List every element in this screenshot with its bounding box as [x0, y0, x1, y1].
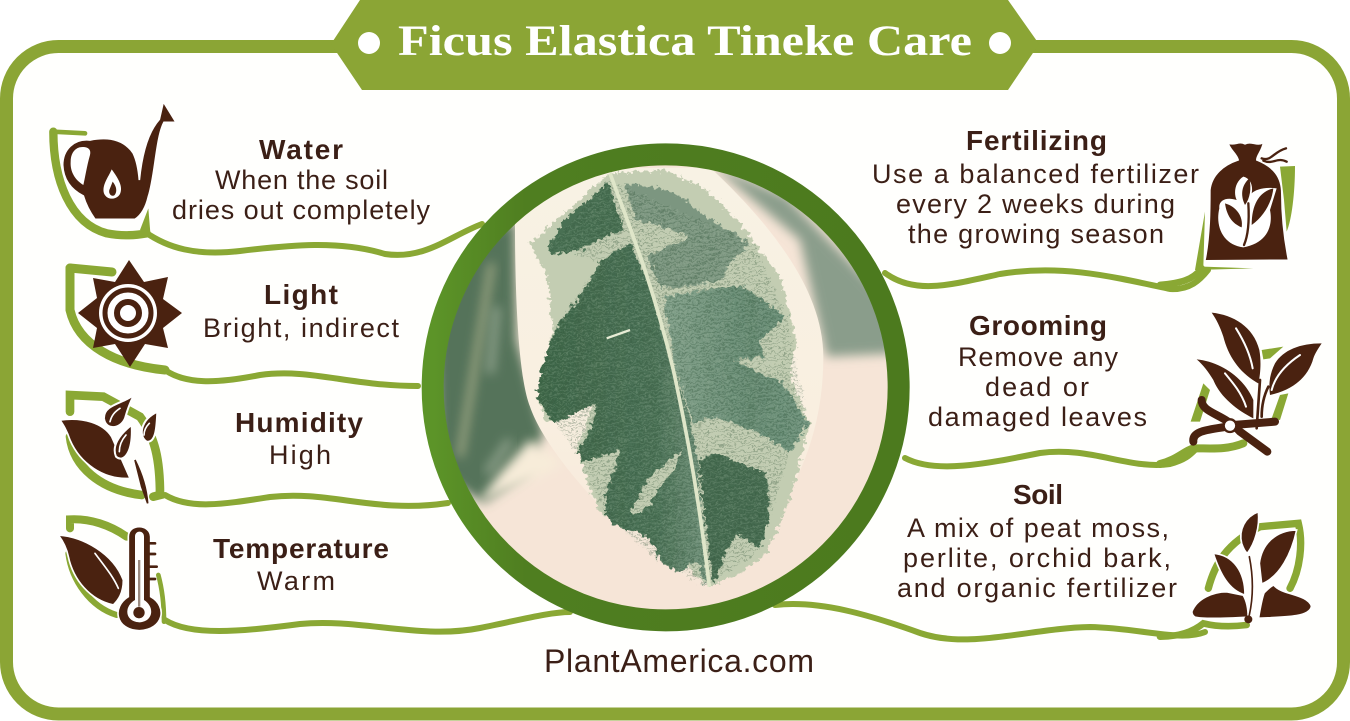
icon: fertilizer bag — [1160, 143, 1295, 285]
description: soil: A mix of peat moss, — [907, 513, 1169, 543]
description: water: dries out completely — [172, 195, 430, 225]
icon: leaves and shears — [1160, 313, 1322, 464]
heading: water: Water — [259, 134, 343, 165]
dark lower-right patch — [698, 453, 770, 587]
website credit: PlantAmerica.com — [544, 643, 814, 679]
description: grooming: dead or — [985, 372, 1089, 402]
pale variegation — [530, 170, 810, 587]
central photo: variegated leaf — [420, 140, 920, 640]
panel: fertilizing — [872, 125, 1295, 285]
description: grooming: damaged leaves — [928, 402, 1147, 432]
description: grooming: Remove any — [958, 342, 1118, 372]
description: water: When the soil — [215, 165, 388, 195]
icon: watering can — [53, 102, 176, 237]
heading: fertilizing: Fertilizing — [966, 125, 1107, 156]
description: temperature: Warm — [257, 566, 335, 596]
heading: soil: Soil — [1013, 479, 1063, 510]
description: humidity: High — [269, 440, 331, 470]
photo ring — [433, 154, 899, 620]
description: water — [172, 165, 430, 225]
panel: light — [70, 260, 399, 370]
icon: leaf and thermometer — [58, 519, 164, 631]
title: Ficus Elastica Tineke Care — [398, 18, 972, 65]
description: fertilizing: Use a balanced fertilizer — [872, 159, 1199, 189]
description: soil: and organic fertilizer — [897, 573, 1177, 603]
description: soil: perlite, orchid bark, — [903, 543, 1171, 573]
heading: temperature: Temperature — [213, 533, 389, 564]
description: fertilizing: the growing season — [908, 219, 1164, 249]
panel: grooming — [928, 310, 1322, 464]
panel: humidity — [60, 393, 363, 503]
description: fertilizing — [872, 159, 1199, 249]
dark mid-right patch — [663, 285, 808, 452]
description: light: Bright, indirect — [203, 313, 399, 343]
midrib — [610, 173, 709, 587]
panel: water — [53, 102, 431, 237]
pale streak — [630, 448, 683, 515]
description: soil — [897, 513, 1177, 603]
icon: sprout in soil — [1160, 512, 1312, 637]
icon: sun — [70, 260, 182, 370]
icon: leaf with drops — [60, 393, 160, 503]
description: grooming — [928, 342, 1147, 432]
panel: soil — [897, 479, 1312, 637]
vine connectors — [145, 224, 1208, 639]
leaf blade — [515, 168, 824, 472]
dark left patch — [537, 243, 707, 587]
heading: light: Light — [264, 279, 338, 310]
title banner — [331, 0, 1039, 90]
dark upper-left patch — [548, 180, 623, 255]
dark upper-right patch — [623, 183, 750, 288]
panel: temperature — [58, 519, 389, 631]
heading: humidity: Humidity — [235, 407, 363, 438]
description: fertilizing: every 2 weeks during — [896, 189, 1175, 219]
heading: grooming: Grooming — [969, 310, 1107, 341]
